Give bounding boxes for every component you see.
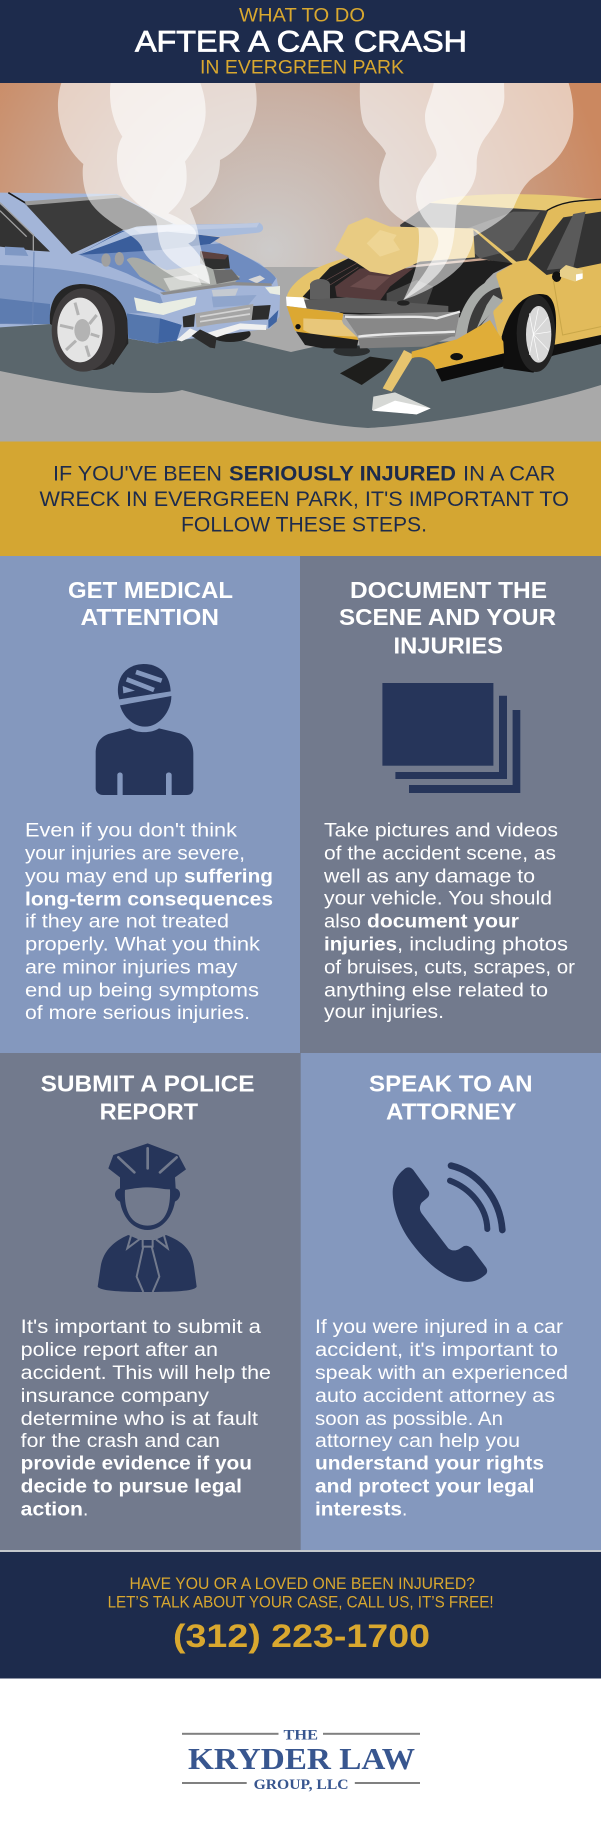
body text: your injuries are severe, [25,844,245,865]
roof [430,194,601,211]
body text: accident, it's important to [315,1340,558,1361]
heading: REPORT [100,1099,199,1125]
door mirror [552,271,561,282]
panel: submit a police report [0,1053,301,1550]
body text: are minor injuries may [25,958,238,979]
body text: insurance company [21,1386,210,1407]
door line and mirror [0,252,34,324]
open hood [78,223,263,255]
body text: of more serious injuries. [25,1003,250,1024]
heading: GET MEDICAL [68,577,233,603]
body text: interests [315,1500,402,1521]
headlights [134,297,197,315]
front bumper [343,312,460,337]
smoke plume right [360,82,573,300]
body text: Take pictures and videos [324,820,558,841]
body [0,193,280,343]
body text: action [21,1500,83,1521]
wheel [50,284,128,365]
side window [0,204,50,252]
engine bay [303,258,513,317]
blue car [0,193,280,372]
heading [369,1071,532,1125]
heading: SUBMIT A POLICE [41,1071,255,1097]
body text: decide to pursue legal [21,1477,242,1498]
debris white [372,392,431,414]
logo: The Kryder Law Group [182,1728,420,1793]
intro band: WRECK IN EVERGREEN PARK, IT'S IMPORTANT TO [40,487,569,511]
body text: Even if you don't think [25,820,238,841]
heading [41,1071,255,1125]
heading: SCENE AND YOUR [339,604,556,630]
engine bay [80,243,276,292]
underbody [552,335,601,356]
ground [0,267,601,442]
lower body panel [0,298,50,324]
body text [323,820,576,1023]
body text: of the accident scene, as [324,844,556,865]
logo: The Kryder Law Group: THE [284,1728,318,1744]
door seam [553,280,601,335]
heading [339,577,556,658]
windshield [24,195,173,254]
tyre under front [333,346,370,356]
body text: accident. This will help the [21,1363,271,1384]
call to action text: LET’S TALK ABOUT YOUR CASE, CALL US, IT’S FREE! [108,1593,494,1612]
body text: injuries [324,935,397,956]
wheel arch trim [456,277,500,336]
body text: anything else related to [324,980,548,1002]
intro band: SERIOUSLY INJURED [229,461,456,485]
gold front [287,306,358,341]
heading: ATTORNEY [386,1099,517,1125]
body text [21,1317,271,1521]
header line three: IN EVERGREEN PARK [200,57,404,78]
debris black [340,357,393,385]
body text: . [402,1500,407,1521]
yellow car [286,194,601,414]
body text: auto accident attorney as [315,1386,555,1407]
body text: If you were injured in a car [315,1317,564,1338]
heading: SPEAK TO AN [369,1071,532,1097]
body text: police report after an [21,1340,218,1361]
panel: get medical attention [0,556,300,1053]
body text: for the crash and can [21,1431,220,1452]
body text: attorney can help you [315,1431,520,1452]
call to action text [108,1574,494,1612]
body text: if they are not treated [25,911,229,932]
logo: The Kryder Law Group: GROUP, LLC [254,1777,349,1793]
body text: speak with an experienced [315,1363,568,1384]
radiator beam [303,297,448,315]
main title: AFTER A CAR CRASH [135,26,467,59]
headlight [286,297,307,308]
centre bumper [212,295,257,307]
intro band: IF YOU'VE BEEN [53,461,222,485]
body text: soon as possible. An [315,1409,503,1430]
icon: police officer [98,1143,197,1292]
body text: suffering [184,867,273,888]
body text [25,820,273,1024]
mid body panel [0,265,167,337]
logo: The Kryder Law Group: KRYDER LAW [188,1741,415,1776]
under-car dark wheel [209,326,251,342]
body text: properly. What you think [25,935,261,956]
wheel [502,294,556,373]
call to action text: HAVE YOU OR A LOVED ONE BEEN INJURED? [130,1574,475,1593]
icon: phone handset [393,1166,502,1282]
panel: document the scene [300,556,601,1053]
side body [493,201,601,357]
body text: understand your rights [315,1454,544,1475]
body text: and protect your legal [315,1477,534,1498]
bent fender strip [383,350,414,392]
panel: speak to an attorney [301,1053,601,1550]
body text: determine who is at fault [21,1409,259,1430]
icon: stacked photos [382,683,520,793]
body text: document your [367,911,520,932]
body text: end up being symptoms [25,980,259,1002]
header line one: WHAT TO DO [239,6,365,27]
body text: provide evidence if you [21,1454,252,1475]
phone number: (312) 223-1700 [173,1618,430,1654]
body text: . [83,1500,88,1521]
smoke plume left [58,82,257,284]
crumpled hood [335,217,475,275]
body text: you may end up [25,867,178,888]
body text [315,1317,568,1521]
body text: It's important to submit a [21,1317,262,1338]
body text: long-term consequences [25,890,273,911]
body text: your vehicle. You should [324,888,552,909]
body text: also [324,911,361,932]
front grille trim [160,283,279,297]
fender [412,320,504,369]
road shadow [0,320,601,428]
body text: of bruises, cuts, scrapes, or [324,958,576,979]
header band [0,0,601,83]
body text: well as any damage to [323,867,535,888]
illustration: two crashed cars with smoke [0,82,601,442]
intro band: IN A CAR [463,461,556,485]
body text: , including photos [397,935,568,956]
icon: injured person with bandaged head [96,664,193,795]
heading [68,577,233,630]
side window [528,212,601,275]
call to action band [0,1552,601,1678]
bent white bumper [177,323,267,341]
heading: ATTENTION [80,604,219,630]
heading: DOCUMENT THE [350,577,547,603]
body text: your injuries. [324,1002,444,1023]
heading: INJURIES [394,632,503,658]
intro band: FOLLOW THESE STEPS. [181,512,427,536]
windshield [400,203,548,265]
sky background [0,82,601,268]
left front yellow shoulder [287,258,357,298]
intro band [0,442,601,556]
